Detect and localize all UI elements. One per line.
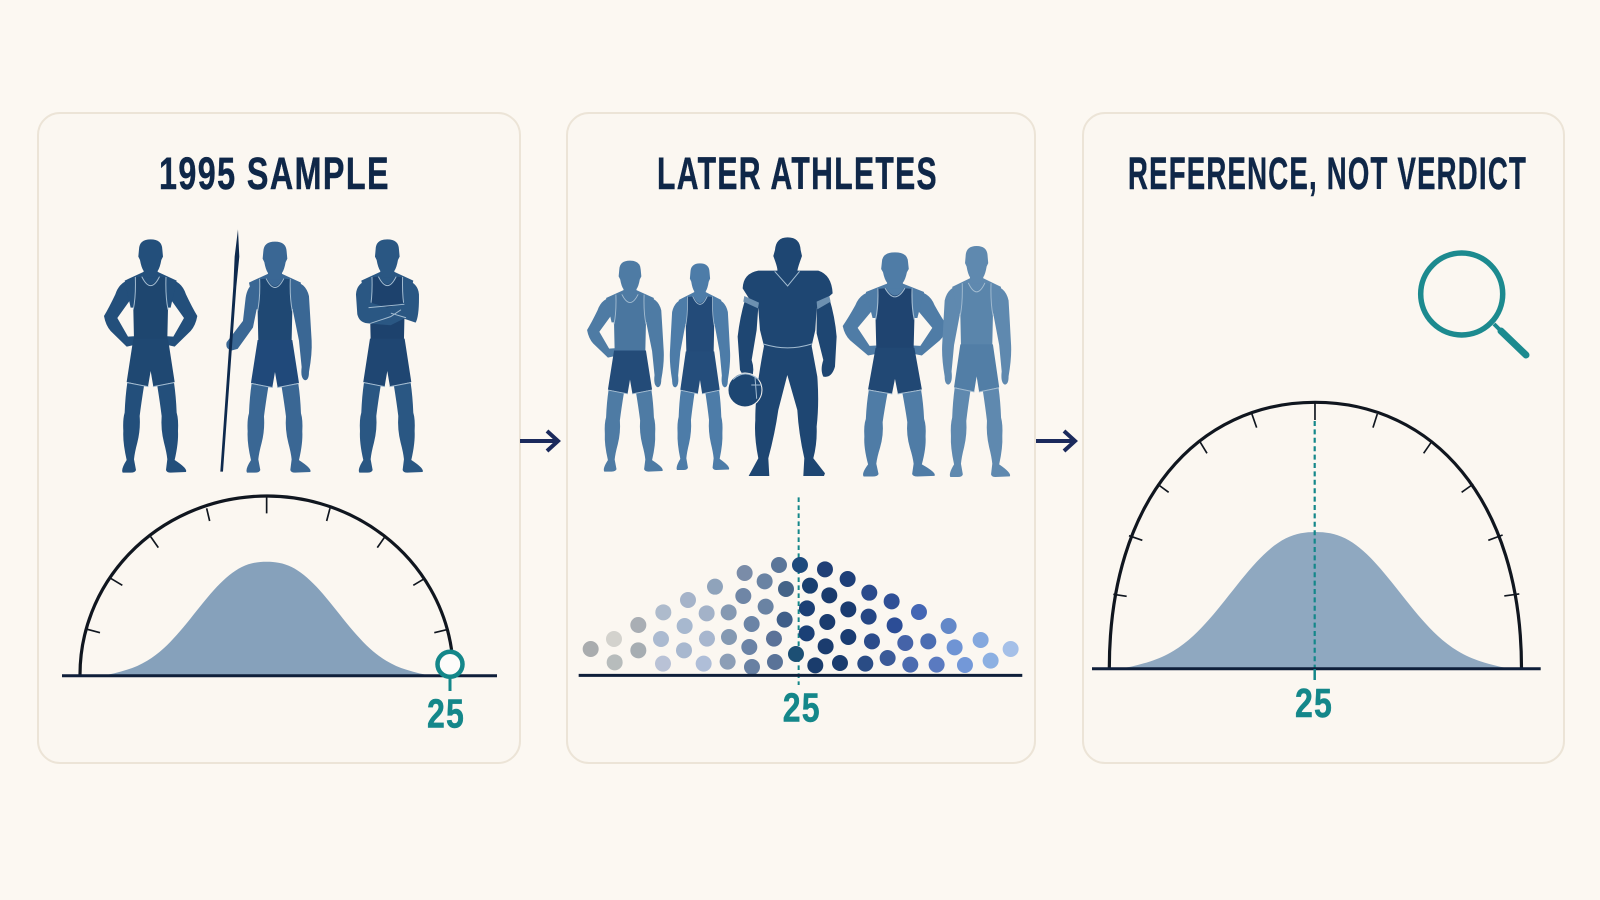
gauge: 1995 distribution bbox=[62, 496, 497, 736]
gauge arc bbox=[1109, 402, 1522, 669]
athlete group 1995 bbox=[104, 229, 423, 473]
panel: reference, not verdict bbox=[1083, 113, 1564, 763]
panel: 1995 sample bbox=[38, 113, 520, 763]
bell curve bbox=[1118, 532, 1512, 669]
icon: magnifying glass bbox=[1421, 253, 1526, 355]
javelin bbox=[220, 229, 239, 472]
label: 25: 25 bbox=[427, 690, 465, 736]
baseline bbox=[579, 671, 1022, 680]
heading: later athletes: LATER ATHLETES bbox=[657, 148, 938, 199]
athlete: one hand on hip bbox=[587, 261, 664, 472]
panel: later athletes bbox=[567, 113, 1035, 763]
gauge ticks bbox=[87, 497, 448, 633]
baseline bbox=[62, 674, 497, 677]
helmet bbox=[728, 373, 762, 407]
athlete: arms crossed bbox=[356, 239, 423, 473]
label: 25: 25 bbox=[783, 685, 821, 731]
baseline bbox=[1092, 667, 1541, 670]
dots bbox=[583, 557, 1019, 675]
marker at 25 bbox=[438, 652, 462, 691]
athlete: football player bbox=[728, 237, 837, 476]
dashed line at 25 bbox=[1314, 421, 1316, 669]
arrow: later athletes to reference bbox=[1036, 431, 1075, 451]
arrow: 1995 sample to later athletes bbox=[520, 431, 558, 451]
dot distribution bbox=[579, 497, 1022, 685]
heading: 1995 sample: 1995 SAMPLE bbox=[159, 148, 390, 199]
athlete: hands on hips broad bbox=[843, 252, 947, 477]
athlete: hands on hips bbox=[104, 239, 197, 473]
dashed line at 25 bbox=[796, 497, 802, 685]
gauge arc bbox=[80, 496, 452, 676]
label: 25: 25 bbox=[1295, 680, 1333, 726]
athlete: tall pale bbox=[942, 246, 1011, 477]
tick at 25 bbox=[1313, 669, 1316, 680]
athlete: javelin thrower bbox=[226, 242, 312, 473]
bell curve bbox=[101, 562, 433, 676]
gauge ticks bbox=[1113, 402, 1519, 596]
athlete: slim runner bbox=[670, 263, 730, 470]
gauge: reference distribution bbox=[1092, 402, 1541, 726]
athlete group later bbox=[587, 237, 1011, 477]
